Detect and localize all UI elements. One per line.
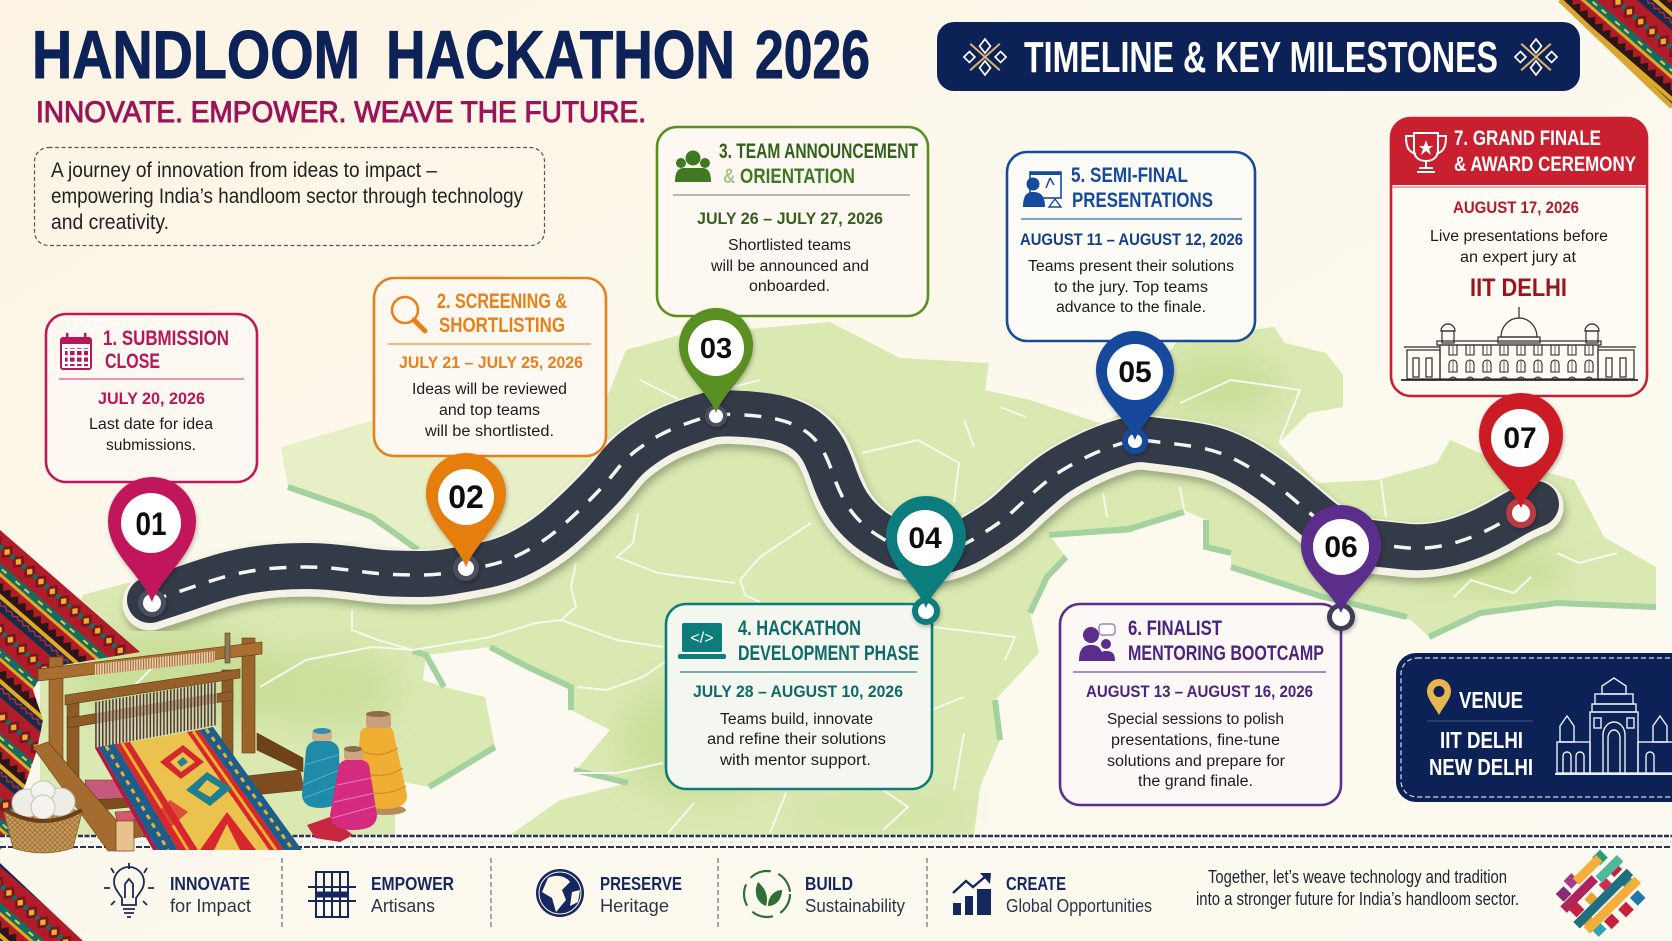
description: the grand finale. bbox=[1138, 773, 1253, 790]
banner ornament left bbox=[964, 39, 1006, 75]
title bbox=[32, 17, 870, 93]
map of India bbox=[40, 322, 1656, 835]
description: an expert jury at bbox=[1460, 249, 1577, 266]
title: HACKATHON bbox=[386, 17, 735, 93]
tagline: INNOVATE. EMPOWER. WEAVE THE FUTURE. bbox=[36, 96, 646, 129]
icon: location pin bbox=[1427, 679, 1451, 715]
textile corner: left bbox=[0, 530, 140, 941]
footer item: preserve: PRESERVE bbox=[600, 874, 682, 894]
footer item: empower: EMPOWER bbox=[371, 874, 454, 894]
date: AUGUST 17, 2026 bbox=[1453, 198, 1579, 217]
description: will be announced and bbox=[710, 258, 869, 275]
description bbox=[89, 416, 213, 454]
intro text box: A journey of innovation from ideas to impact – bbox=[51, 159, 437, 182]
icon: light bulb bbox=[104, 863, 154, 917]
map pin 05: 05 bbox=[1118, 356, 1152, 389]
banner ornament right bbox=[1515, 39, 1557, 75]
intro text box: and creativity. bbox=[51, 211, 169, 234]
footer item: build: Sustainability bbox=[805, 896, 905, 916]
heading: 1. SUBMISSION bbox=[103, 327, 229, 350]
description: presentations, fine-tune bbox=[1111, 732, 1280, 749]
icon: mentors bbox=[1079, 624, 1115, 661]
cotton basket bbox=[4, 781, 82, 853]
icon: globe bbox=[536, 869, 584, 917]
description bbox=[1430, 228, 1608, 266]
description: Shortlisted teams bbox=[728, 237, 851, 254]
venue name: IIT DELHI bbox=[1470, 274, 1567, 302]
heddle reed bbox=[95, 651, 215, 675]
footer item: preserve bbox=[536, 869, 682, 917]
description: Ideas will be reviewed bbox=[412, 381, 567, 398]
closing message: into a stronger future for India’s handloom sector. bbox=[1196, 889, 1519, 909]
heading bbox=[1454, 127, 1636, 176]
warp threads bbox=[95, 682, 217, 748]
description bbox=[1028, 258, 1234, 316]
heading: 7. GRAND FINALE bbox=[1454, 127, 1601, 150]
intro text box: empowering India’s handloom sector through technology bbox=[51, 185, 523, 208]
description: Teams build, innovate bbox=[720, 711, 873, 728]
footer item: create: Global Opportunities bbox=[1006, 896, 1152, 916]
heading: 4. HACKATHON bbox=[738, 617, 861, 640]
icon: laptop bbox=[678, 623, 726, 659]
icon: trophy bbox=[1406, 133, 1446, 172]
footer separators bbox=[282, 858, 927, 927]
venue address bbox=[1429, 727, 1533, 780]
map pin 07 bbox=[1479, 393, 1563, 528]
panel: step 7 grand finale bbox=[1390, 117, 1648, 396]
icon: recycling leaf bbox=[744, 871, 790, 917]
panel: step 3 team announcement: & ORIENTATION bbox=[723, 165, 855, 188]
heading bbox=[738, 617, 919, 665]
footer item: empower: Artisans bbox=[371, 896, 435, 916]
heading bbox=[1128, 617, 1324, 665]
panel: step 6 mentoring bootcamp bbox=[1060, 604, 1341, 805]
description bbox=[1107, 711, 1285, 790]
description: and top teams bbox=[439, 402, 540, 419]
heading: DEVELOPMENT PHASE bbox=[738, 642, 919, 665]
date: AUGUST 11 – AUGUST 12, 2026 bbox=[1020, 230, 1243, 249]
description bbox=[710, 237, 869, 295]
map pin 06: 06 bbox=[1324, 531, 1358, 564]
map pin 03: 03 bbox=[700, 333, 732, 365]
map pin 01 bbox=[108, 477, 196, 617]
heading: SHORTLISTING bbox=[439, 314, 565, 337]
description bbox=[707, 711, 886, 769]
intro text box bbox=[34, 148, 544, 246]
date: JULY 28 – AUGUST 10, 2026 bbox=[693, 682, 903, 701]
footer item: build: BUILD bbox=[805, 874, 853, 894]
footer item: build bbox=[744, 871, 905, 917]
description: Special sessions to polish bbox=[1107, 711, 1284, 728]
footer item: preserve: Heritage bbox=[600, 896, 669, 916]
heading bbox=[437, 290, 567, 337]
central bay bbox=[395, 647, 628, 835]
icon: growth chart bbox=[953, 873, 991, 915]
panel: venue bbox=[1396, 653, 1672, 802]
description bbox=[412, 381, 567, 440]
map pin 06 bbox=[1301, 505, 1381, 631]
heading: 6. FINALIST bbox=[1128, 617, 1222, 640]
description: with mentor support. bbox=[719, 752, 871, 769]
heading: 5. SEMI-FINAL bbox=[1071, 164, 1188, 187]
icon: laptop: </> bbox=[690, 630, 714, 647]
map pin 04: 04 bbox=[908, 522, 942, 555]
loom frame bbox=[33, 633, 304, 851]
heading: 2. SCREENING & bbox=[437, 290, 567, 313]
footer item: empower bbox=[308, 872, 454, 917]
woven fabric bbox=[95, 727, 302, 850]
date: JULY 26 – JULY 27, 2026 bbox=[697, 209, 883, 228]
description: submissions. bbox=[106, 437, 196, 454]
description: to the jury. Top teams bbox=[1054, 279, 1208, 296]
description: Teams present their solutions bbox=[1028, 258, 1234, 275]
footer item: innovate bbox=[104, 863, 251, 917]
description: will be shortlisted. bbox=[424, 423, 554, 440]
banner heading: TIMELINE & KEY MILESTONES bbox=[1024, 33, 1498, 82]
date: JULY 21 – JULY 25, 2026 bbox=[399, 353, 583, 372]
icon: people bbox=[675, 150, 711, 182]
panel: step 3 team announcement bbox=[657, 127, 928, 316]
footer item: innovate: for Impact bbox=[170, 896, 251, 916]
venue label: VENUE bbox=[1459, 687, 1523, 713]
description: Last date for idea bbox=[89, 416, 213, 433]
map pin 01: 01 bbox=[136, 506, 166, 542]
map pin 02: 02 bbox=[448, 479, 484, 515]
title: HANDLOOM bbox=[32, 17, 360, 93]
map pin 05 bbox=[1096, 331, 1174, 454]
heading bbox=[1071, 164, 1213, 212]
venue address: NEW DELHI bbox=[1429, 754, 1533, 780]
description: solutions and prepare for bbox=[1107, 753, 1285, 770]
textile corner: top right bbox=[1560, 0, 1672, 107]
panel: step 1 submission close bbox=[46, 314, 257, 482]
footer item: create: CREATE bbox=[1006, 874, 1066, 894]
footer item: create bbox=[953, 873, 1152, 916]
logo: woven diamond bbox=[1548, 841, 1653, 941]
icon: IIT Delhi building bbox=[1401, 307, 1638, 380]
map pin 03 bbox=[679, 308, 753, 427]
panel: step 4 development phase bbox=[666, 604, 932, 789]
heading: MENTORING BOOTCAMP bbox=[1128, 642, 1324, 665]
title: 2026 bbox=[755, 17, 870, 93]
icon: magnifier bbox=[392, 297, 425, 331]
description: Live presentations before bbox=[1430, 228, 1608, 245]
heading bbox=[103, 327, 229, 373]
venue address: IIT DELHI bbox=[1440, 727, 1523, 753]
description: onboarded. bbox=[749, 278, 830, 295]
timeline banner bbox=[937, 22, 1580, 91]
date: AUGUST 13 – AUGUST 16, 2026 bbox=[1086, 682, 1313, 701]
closing message bbox=[1196, 867, 1519, 909]
decorative band bbox=[0, 835, 1672, 848]
map pin 07: 07 bbox=[1503, 422, 1537, 455]
heading: PRESENTATIONS bbox=[1072, 189, 1213, 212]
road timeline bbox=[150, 413, 1536, 603]
icon: loom mark bbox=[308, 872, 356, 917]
description: advance to the finale. bbox=[1056, 299, 1206, 316]
panel: step 2 screening and shortlisting bbox=[374, 278, 606, 456]
panel: step 5 semi-final presentations bbox=[1007, 152, 1255, 341]
thread spools bbox=[302, 711, 407, 842]
icon: India Gate bbox=[1555, 678, 1672, 774]
heading: 3. TEAM ANNOUNCEMENT bbox=[719, 140, 918, 163]
icon: presenter bbox=[1023, 172, 1061, 207]
footer item: innovate: INNOVATE bbox=[170, 874, 250, 894]
closing message: Together, let’s weave technology and tradition bbox=[1208, 867, 1507, 887]
map pin 04 bbox=[886, 496, 966, 625]
map pin 02 bbox=[426, 453, 506, 581]
icon: calendar bbox=[61, 333, 91, 369]
heading: CLOSE bbox=[105, 350, 160, 373]
date: JULY 20, 2026 bbox=[98, 389, 205, 408]
illustration: loom with fabric bbox=[4, 633, 407, 853]
description: and refine their solutions bbox=[707, 731, 886, 748]
